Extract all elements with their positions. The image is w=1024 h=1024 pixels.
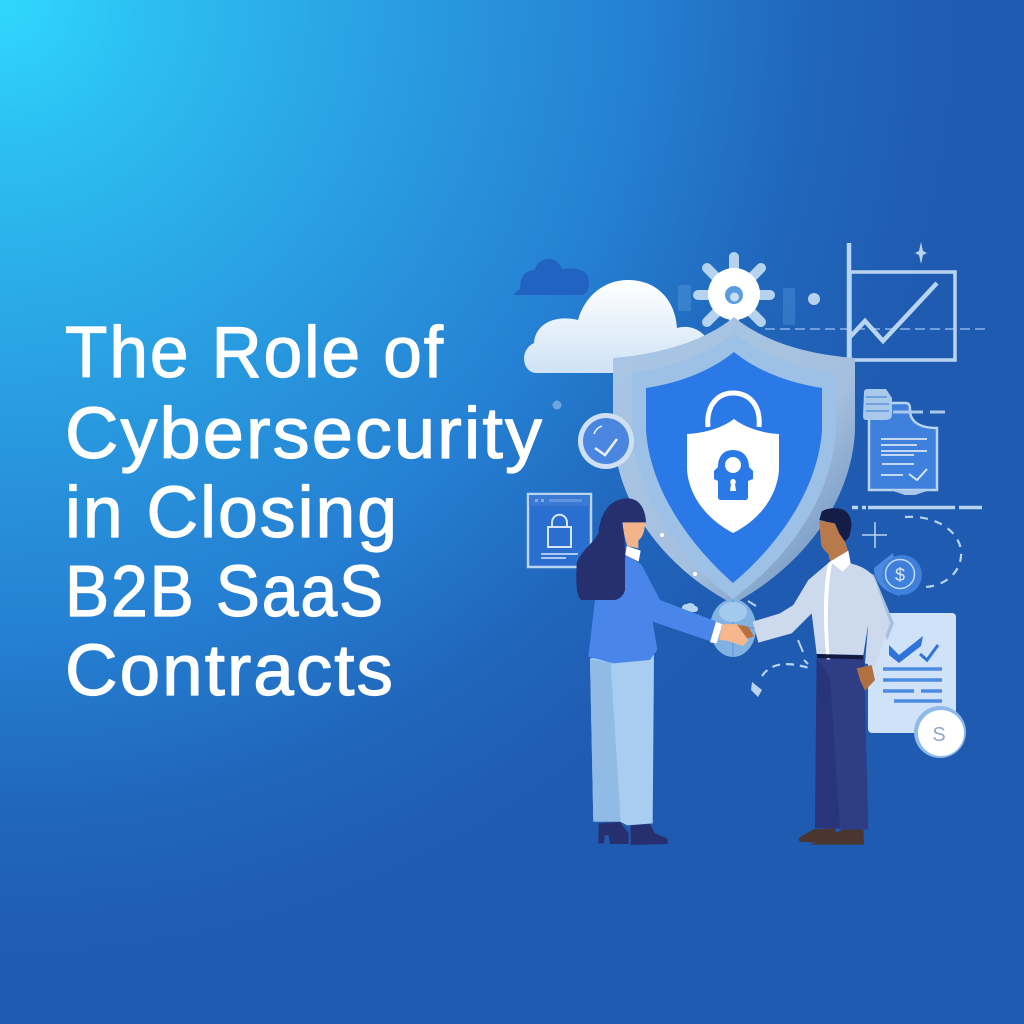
title <box>65 313 544 711</box>
man belt <box>817 654 863 659</box>
faint background bars and dashed line <box>552 285 985 410</box>
decorative long dashes and sparkle <box>748 508 982 697</box>
man collar <box>830 551 851 572</box>
woman collar <box>625 546 641 562</box>
man trousers <box>815 657 868 831</box>
man hand on hip <box>857 665 875 691</box>
chart panel <box>849 242 955 373</box>
handshake <box>719 624 754 646</box>
icon: white cloud <box>524 280 708 373</box>
man shoes <box>799 828 864 845</box>
icon: document <box>863 389 945 495</box>
woman shoes <box>598 822 668 845</box>
title: B2B SaaS <box>65 552 385 632</box>
icon: check badge <box>578 413 634 469</box>
woman jacket <box>588 555 717 663</box>
man hair <box>819 508 851 542</box>
man shirt shade <box>863 569 894 640</box>
icon: lock window <box>528 494 591 567</box>
title: The Role of <box>65 313 445 393</box>
title: Contracts <box>65 631 395 711</box>
shield lock icon <box>687 393 779 533</box>
icon: dollar badge: $ <box>895 565 905 585</box>
man face and neck <box>819 521 848 562</box>
man placket <box>824 563 832 659</box>
handshake globe <box>710 599 756 657</box>
icon: contract document <box>868 613 956 733</box>
man arm and shirt <box>753 562 890 666</box>
man figure <box>719 508 894 845</box>
small cloud puff <box>682 603 698 612</box>
title: Cybersecurity <box>65 394 544 474</box>
woman trousers <box>590 655 654 825</box>
woman figure <box>576 498 722 845</box>
woman cuff <box>710 622 722 643</box>
icon: dark cloud <box>513 259 589 295</box>
icon: gear <box>698 257 770 335</box>
icon: dollar badge <box>874 553 922 596</box>
icon: dollar coin: S <box>932 724 946 746</box>
woman hair <box>576 498 646 600</box>
icon: dollar coin <box>914 706 966 758</box>
shield <box>613 317 855 604</box>
title: in Closing <box>65 473 399 553</box>
woman face <box>623 522 645 548</box>
